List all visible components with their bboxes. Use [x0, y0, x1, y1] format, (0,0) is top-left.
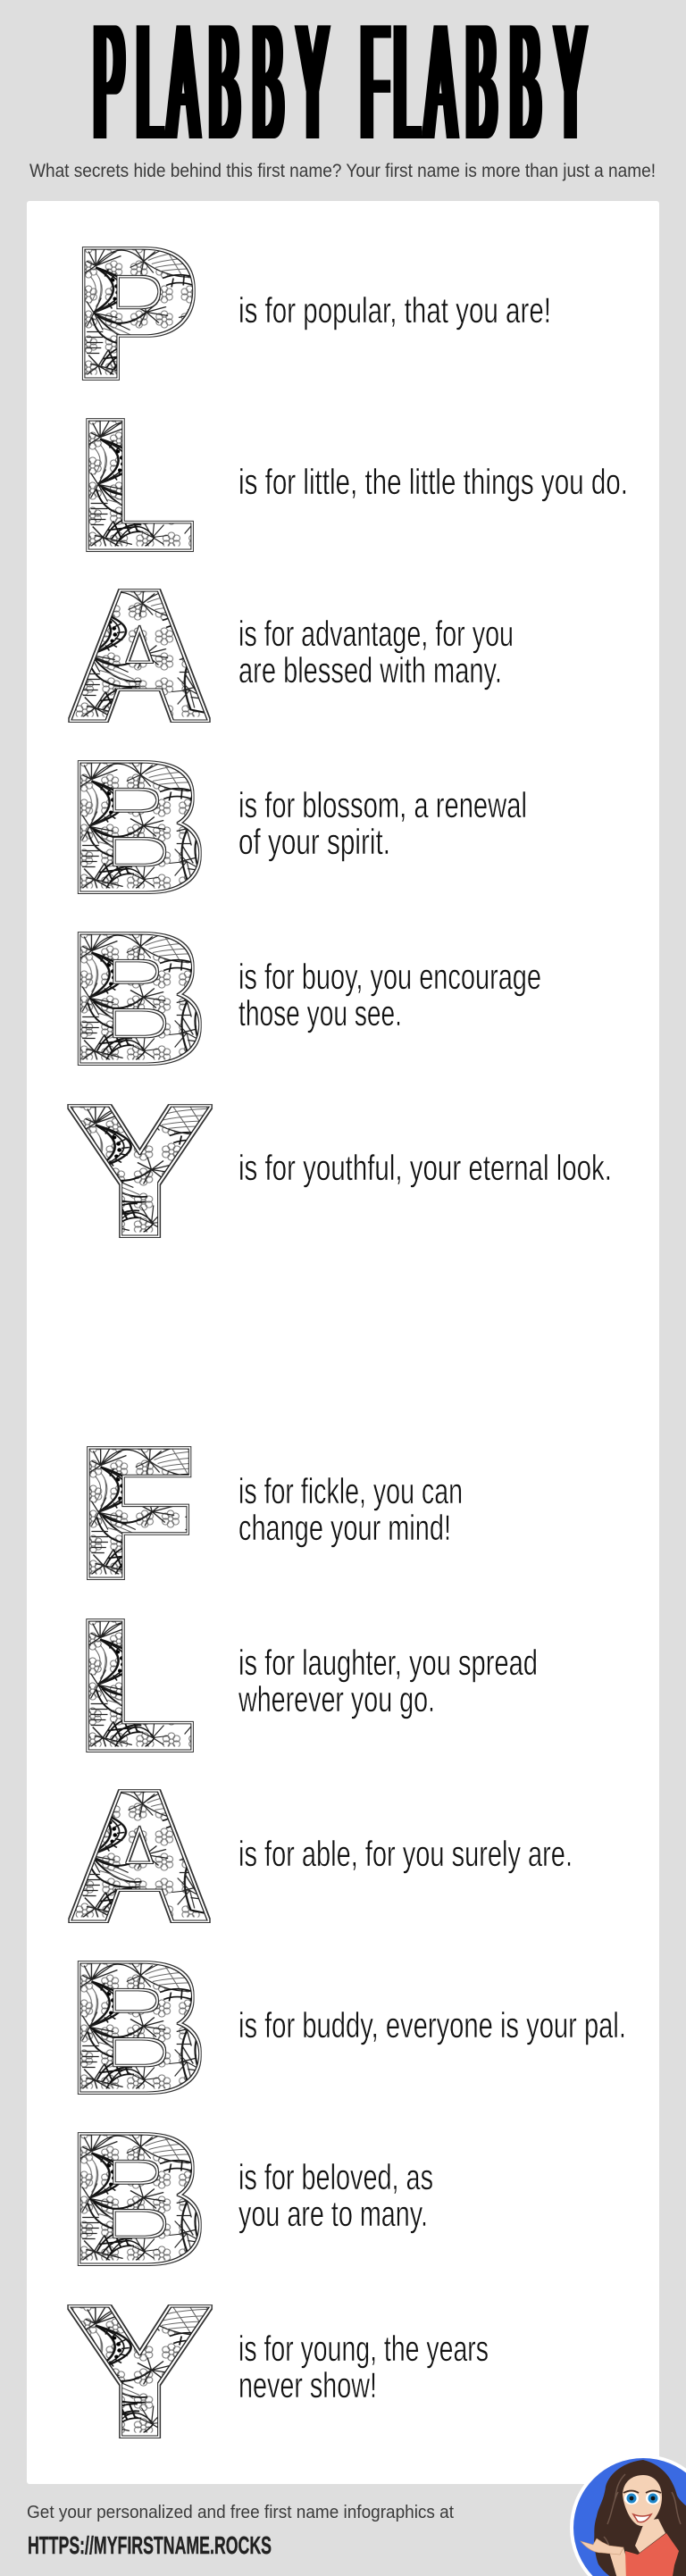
- text: fickle: [238, 1472, 463, 1548]
- text: advantage: [238, 615, 514, 690]
- footer url: HTTPS://MYFIRSTNAME.ROCKS: [28, 2531, 272, 2559]
- icon: mandala letter B: B: [71, 899, 204, 1098]
- text: young: is for young, the years: [238, 2329, 489, 2369]
- row: B: [71, 899, 541, 1098]
- text: beloved: is for beloved, as: [238, 2158, 433, 2197]
- text: advantage: are blessed with many.: [238, 651, 502, 690]
- eyes: [624, 2492, 639, 2505]
- text: young: [238, 2329, 489, 2405]
- row: Y: [73, 2272, 489, 2471]
- text: able: is for able, for you surely are.: [238, 1835, 573, 1874]
- avatar: cartoon woman in blue circle: [570, 2455, 686, 2576]
- text: fickle: change your mind!: [238, 1509, 451, 1548]
- icon: mandala letter L: L: [79, 386, 194, 584]
- row: A: [71, 556, 514, 755]
- text: laughter: is for laughter, you spread: [238, 1643, 538, 1683]
- icon: mandala letter B: B: [71, 2100, 204, 2298]
- text: fickle: is for fickle, you can: [238, 1472, 463, 1511]
- row: L: [79, 1586, 538, 1785]
- text: advantage: is for advantage, for you: [238, 615, 514, 654]
- icon: mandala letter Y: Y: [73, 2272, 206, 2471]
- icon: mandala letter P: P: [76, 214, 196, 413]
- icon: mandala letter A: A: [71, 556, 207, 755]
- row: Y: [73, 1072, 612, 1270]
- text: blossom: [238, 786, 527, 862]
- icon: mandala letter F: F: [80, 1413, 192, 1612]
- row: B: [71, 728, 527, 926]
- footer text: Get your personalized and free first name infographics at: [27, 2503, 454, 2522]
- text: buoy: [238, 958, 541, 1033]
- shirt: [625, 2533, 679, 2576]
- text: beloved: you are to many.: [238, 2195, 428, 2234]
- text: buoy: those you see.: [238, 994, 402, 1033]
- face: [623, 2475, 662, 2526]
- icon: mandala letter L: L: [79, 1586, 194, 1785]
- row: B: [71, 2100, 433, 2298]
- mouth: [633, 2514, 651, 2522]
- text: blossom: is for blossom, a renewal: [238, 786, 527, 825]
- row: F: [80, 1413, 463, 1612]
- arm and neck: [609, 2547, 626, 2576]
- icon: mandala letter A: A: [71, 1757, 207, 1955]
- text: beloved: [238, 2158, 433, 2234]
- text: laughter: [238, 1643, 538, 1719]
- row: A: [71, 1757, 573, 1955]
- icon: mandala letter B: B: [71, 1928, 204, 2127]
- text: buoy: is for buoy, you encourage: [238, 958, 541, 997]
- text: blossom: of your spirit.: [238, 823, 390, 862]
- icon: mandala letter Y: Y: [73, 1072, 206, 1270]
- row: B: [71, 1928, 626, 2127]
- text: laughter: wherever you go.: [238, 1680, 435, 1719]
- row: L: [79, 386, 628, 584]
- hand: [581, 2538, 623, 2555]
- hair: [594, 2460, 686, 2576]
- row: P: [76, 214, 551, 413]
- icon: mandala letter B: B: [71, 728, 204, 926]
- text: popular: is for popular, that you are!: [238, 291, 551, 330]
- text: young: never show!: [238, 2366, 377, 2405]
